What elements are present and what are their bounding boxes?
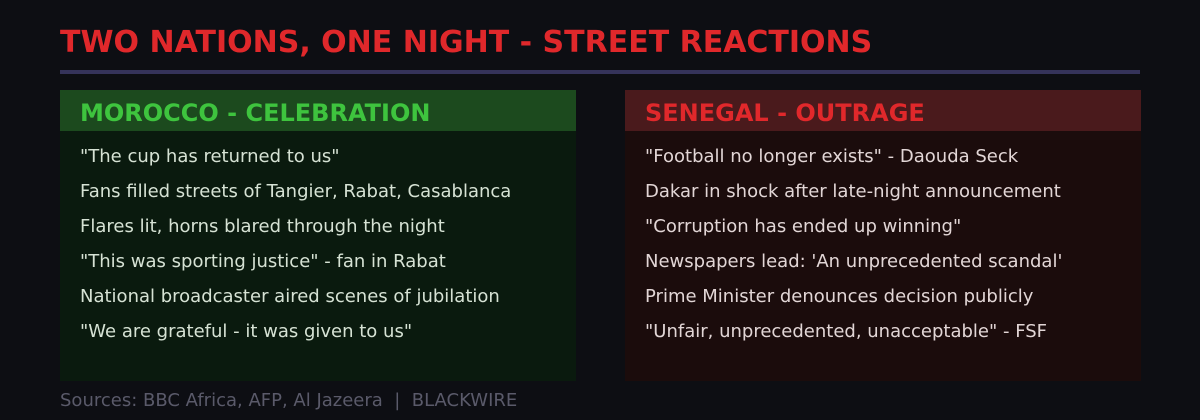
text: item 1: "The cup has returned to us" xyxy=(80,146,340,167)
text: item 2: Dakar in shock after late-night announcement xyxy=(645,181,1061,202)
text: item 5: Prime Minister denounces decision publicly xyxy=(645,286,1033,307)
text: item 6: "We are grateful - it was given to us" xyxy=(80,321,412,342)
panel: senegal xyxy=(625,90,1141,381)
heading: morocco: MOROCCO - CELEBRATION xyxy=(80,99,430,127)
heading: senegal xyxy=(625,90,1141,131)
heading: morocco xyxy=(60,90,576,131)
text: item 4: Newspapers lead: 'An unprecedented scandal' xyxy=(645,251,1062,272)
sources: Sources: BBC Africa, AFP, Al Jazeera | BLACKWIRE xyxy=(60,390,517,411)
text: item 5: National broadcaster aired scenes of jubilation xyxy=(80,286,500,307)
title: TWO NATIONS, ONE NIGHT - STREET REACTIONS xyxy=(60,25,872,60)
text: item 3: Flares lit, horns blared through the night xyxy=(80,216,445,237)
panel: morocco xyxy=(60,90,576,381)
text: item 1: "Football no longer exists" - Daouda Seck xyxy=(645,146,1018,167)
heading: senegal: SENEGAL - OUTRAGE xyxy=(645,99,925,127)
text: item 2: Fans filled streets of Tangier, Rabat, Casablanca xyxy=(80,181,511,202)
text: item 3: "Corruption has ended up winning" xyxy=(645,216,961,237)
text: item 4: "This was sporting justice" - fan in Rabat xyxy=(80,251,446,272)
text: item 6: "Unfair, unprecedented, unacceptable" - FSF xyxy=(645,321,1047,342)
